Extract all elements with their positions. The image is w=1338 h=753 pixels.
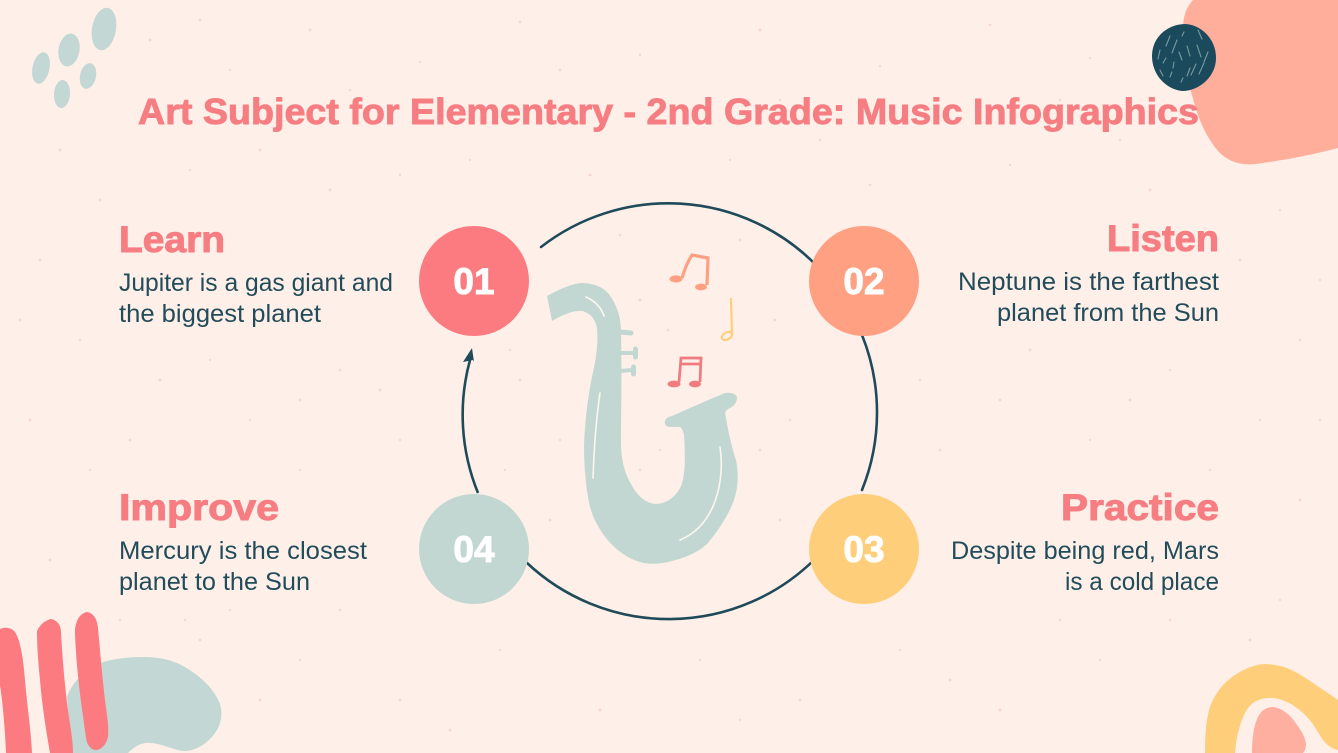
- description: Practice: is a cold place: [1065, 568, 1219, 596]
- cycle diagram: ring segments: [526, 203, 877, 619]
- description: Listen: [958, 268, 1219, 327]
- step 02 badge: [809, 226, 919, 336]
- title: Art Subject for Elementary - 2nd Grade: Music Infographics: [138, 91, 1199, 132]
- step 01 badge: [419, 226, 529, 336]
- icon: yellow quarter note: [720, 298, 734, 342]
- icon: red beamed note: [668, 358, 701, 387]
- description: Listen: planet from the Sun: [997, 299, 1219, 327]
- heading: Practice: Practice: [1061, 487, 1219, 528]
- decoration: top-left mint dots: [29, 6, 120, 109]
- decoration: bottom-left coral strokes: [0, 612, 108, 753]
- description: Improve: [119, 537, 367, 596]
- step 04 badge: [419, 494, 529, 604]
- decoration: bottom-left mint blob: [67, 657, 221, 753]
- step 03 badge: 03: [843, 529, 885, 570]
- arrow: 04 back to 01: [463, 348, 478, 493]
- step 04 badge: 04: [453, 529, 495, 570]
- step 02 badge: 02: [843, 261, 885, 302]
- text block: Learn: [119, 219, 393, 328]
- description: Improve: Mercury is the closest: [119, 537, 367, 565]
- description: Practice: [951, 537, 1219, 596]
- icon: orange beamed note: [670, 255, 708, 290]
- text block: Practice: [951, 487, 1219, 596]
- description: Improve: planet to the Sun: [119, 568, 310, 596]
- saxophone illustration: [547, 283, 738, 564]
- heading: Learn: Learn: [119, 219, 225, 260]
- decoration: bottom-right yellow arch with pink drop: [1205, 664, 1338, 753]
- step 01 badge: 01: [453, 261, 495, 302]
- description: Practice: Despite being red, Mars: [951, 537, 1219, 565]
- decoration: top-right peach blob: [1183, 0, 1338, 164]
- decoration: dark scribble ball: [1152, 24, 1216, 91]
- description: Listen: Neptune is the farthest: [958, 268, 1219, 296]
- heading: Improve: Improve: [119, 487, 279, 528]
- saxophone keys: [620, 332, 636, 374]
- description: Learn: [119, 269, 393, 328]
- text block: Improve: [119, 487, 367, 596]
- step 03 badge: [809, 494, 919, 604]
- description: Learn: Jupiter is a gas giant and: [119, 269, 393, 297]
- saxophone highlights: [586, 297, 721, 540]
- description: Learn: the biggest planet: [119, 300, 321, 328]
- text block: Listen: [958, 218, 1219, 327]
- heading: Listen: Listen: [1107, 218, 1219, 259]
